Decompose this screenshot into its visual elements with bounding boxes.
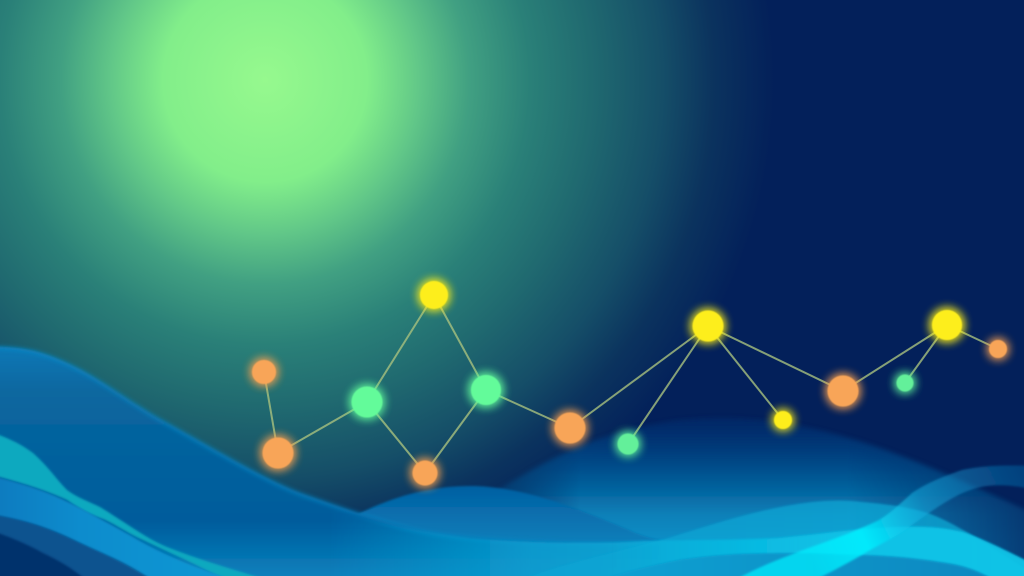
lower blue swell [600,553,1008,576]
back hump wave [350,486,660,576]
node glows [252,280,1008,486]
upper right ribbon [735,465,1024,576]
main blue wave [0,347,660,576]
darkest corner layer [0,527,86,576]
dark lower-left layer [0,513,152,576]
nodes [252,281,1007,486]
lower-left blue band [0,473,232,576]
bright cyan band [600,527,1024,576]
network lines [264,295,998,473]
teal ribbon left [0,428,268,576]
flat cyan band [330,510,1024,576]
far wave [502,419,1024,560]
cyan wave right [522,500,1024,576]
